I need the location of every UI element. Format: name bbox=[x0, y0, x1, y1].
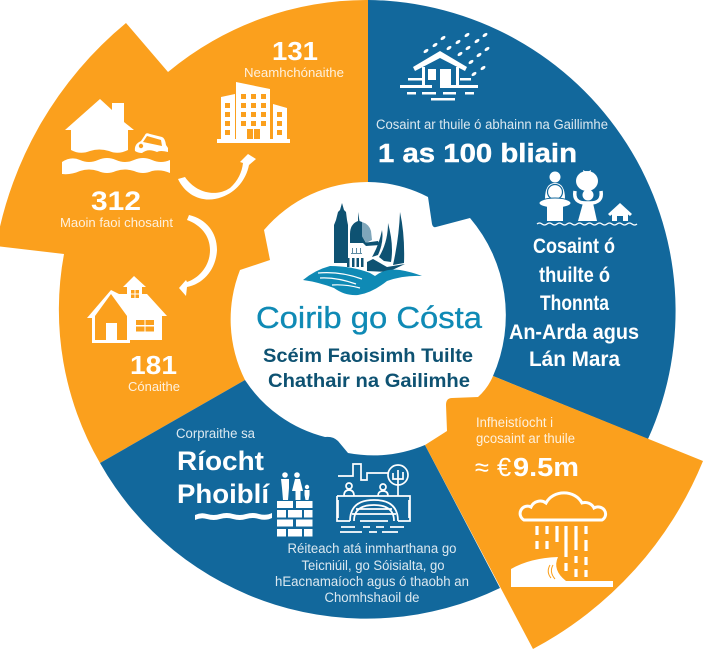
label: residential: Cónaithe bbox=[128, 379, 180, 394]
stat: 131: 131 bbox=[272, 36, 318, 66]
icon: house bbox=[87, 276, 167, 343]
heading: public realm second line: Phoiblí bbox=[177, 479, 271, 509]
icon: office building bbox=[217, 82, 290, 143]
text: investment in flood defence: Infheistíocht i bbox=[476, 415, 553, 430]
panel: investment bbox=[425, 376, 703, 649]
stat: approx 9.5m euro: ≈ bbox=[475, 454, 489, 482]
panel: properties protected bbox=[0, 0, 368, 463]
text: sustainable solution: Chomhshaoil de bbox=[324, 590, 420, 605]
arrow: to non-residential bbox=[178, 154, 256, 200]
label: non-residential: Neamhchónaithe bbox=[244, 65, 344, 80]
icon: rain on house bbox=[400, 32, 490, 101]
text: coastal flood protection: thuilte ó bbox=[539, 263, 610, 287]
stat: approx 9.5m euro bbox=[475, 454, 579, 482]
text: coastal flood protection: Cosaint ó bbox=[533, 234, 615, 258]
stat: approx 9.5m euro: € bbox=[497, 454, 511, 482]
icon: wave bbox=[195, 513, 272, 520]
text: coastal flood protection bbox=[509, 234, 639, 371]
text: coastal flood protection: An-Arda agus bbox=[509, 320, 639, 344]
icon: people on flood wall bbox=[277, 472, 312, 536]
text: coastal flood protection: Lán Mara bbox=[529, 347, 621, 371]
heading: public realm: Ríocht bbox=[177, 446, 264, 476]
stat: 312: 312 bbox=[91, 186, 141, 216]
stat: approx 9.5m euro: 9.5m bbox=[513, 454, 579, 482]
subtitle: Galway flood relief scheme: Chathair na Gailimhe bbox=[268, 370, 470, 392]
text: investment in flood defence: gcosaint ar thuile bbox=[476, 431, 575, 446]
panel: public realm bbox=[100, 380, 500, 619]
text: coastal flood protection: Thonnta bbox=[540, 291, 610, 315]
panel: centre logo bbox=[256, 203, 483, 392]
text: incorporated in: Corpraithe sa bbox=[176, 426, 255, 441]
text: sustainable solution: hEacnamaíoch agus ó thaobh an bbox=[275, 574, 469, 589]
stat: 181: 181 bbox=[130, 350, 177, 380]
icon: cloud rain and wave bbox=[511, 493, 613, 587]
text: river flood protection: Cosaint ar thuile ó abhainn na Gaillimhe bbox=[376, 117, 608, 132]
text: sustainable solution bbox=[275, 541, 469, 605]
subtitle: Galway flood relief scheme bbox=[263, 345, 473, 392]
icon: people and house in flood bbox=[537, 170, 637, 225]
icon: Galway cathedral, sails and waves logo bbox=[303, 203, 422, 295]
text: investment in flood defence bbox=[476, 415, 575, 446]
subtitle: Galway flood relief scheme: Scéim Faoisimh Tuilte bbox=[263, 345, 473, 367]
title: Corrib to Coast: Coirib go Cósta bbox=[256, 300, 483, 335]
panel: flood defence bbox=[368, 0, 676, 439]
text: sustainable solution: Teicniúil, go Sóisialta, go bbox=[302, 558, 444, 573]
icon: bridge and skyline bbox=[337, 464, 410, 532]
stat: 1 in 100 years: 1 as 100 bliain bbox=[378, 140, 577, 168]
icon: flooded house and car bbox=[62, 99, 170, 174]
label: property protected: Maoin faoi chosaint bbox=[60, 215, 173, 230]
arrow: to residential bbox=[179, 215, 217, 296]
text: sustainable solution: Réiteach atá inmharthana go bbox=[288, 541, 456, 556]
